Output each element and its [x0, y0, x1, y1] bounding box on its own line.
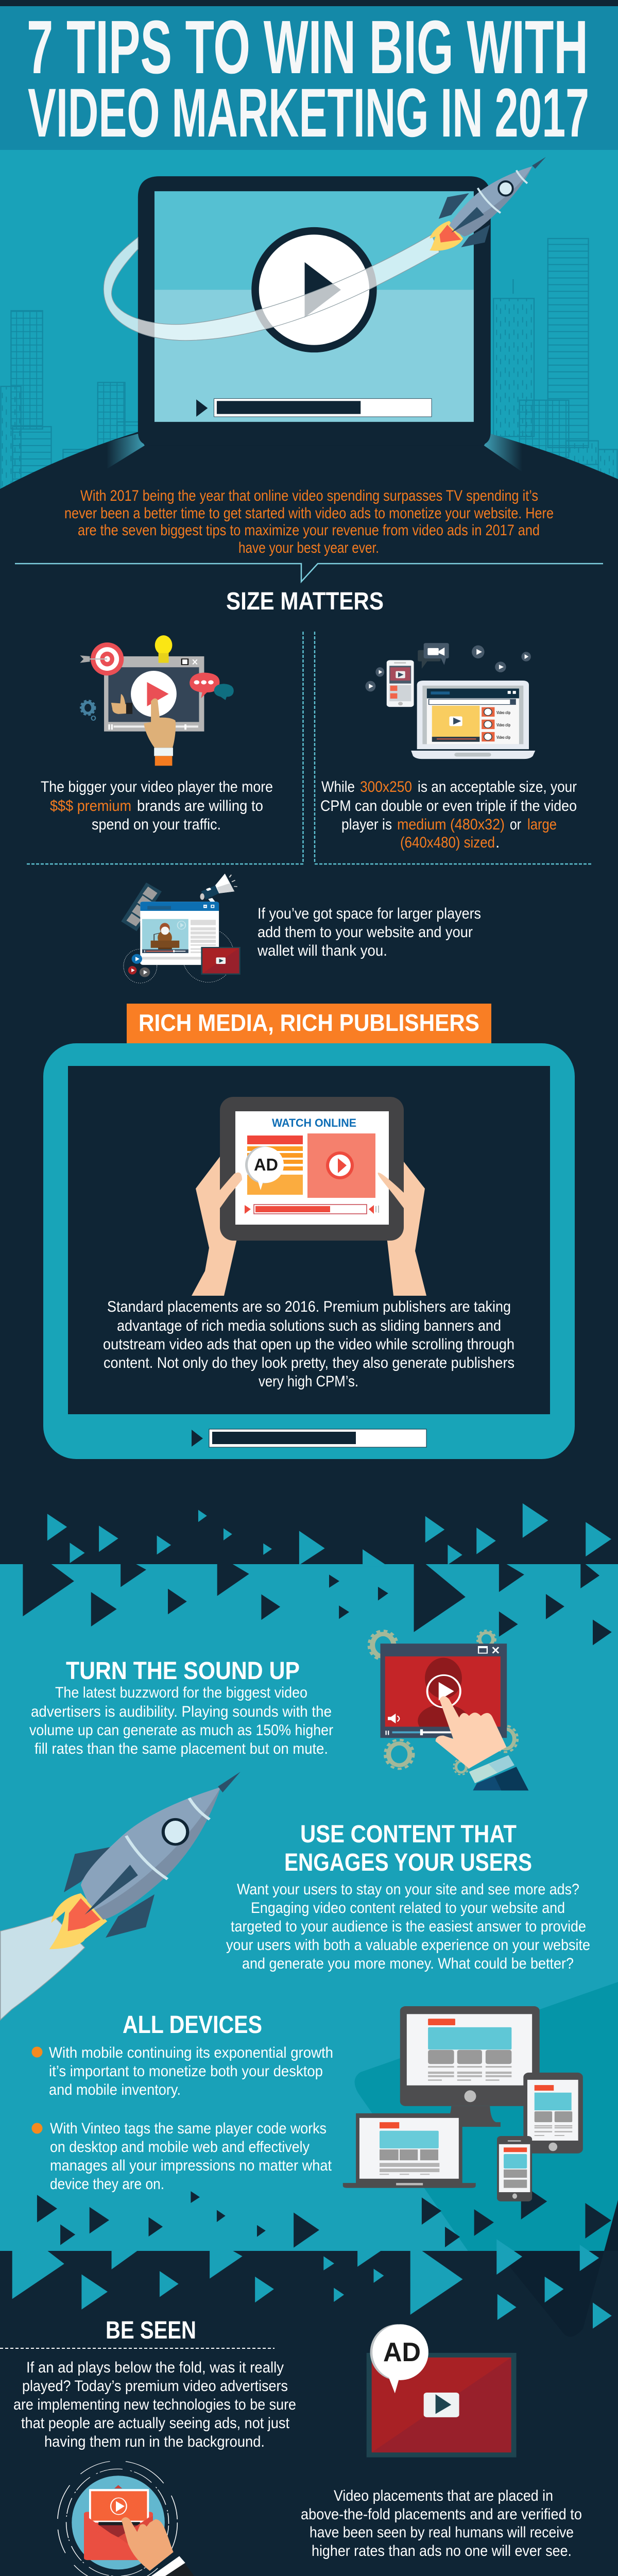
text: audibility: fill rates than the same placement but on mute.	[35, 1740, 328, 1757]
text: below the fold: having them run in the background.	[44, 2433, 265, 2450]
text: 300x250 acceptable size: .	[495, 834, 500, 851]
rocket trail	[1, 1916, 85, 2020]
heading: turn the sound up: TURN THE SOUND UP	[66, 1657, 300, 1685]
text: bigger video player: spend on your traffic.	[92, 816, 221, 833]
text: larger players	[257, 905, 481, 959]
dashed dividers	[27, 632, 591, 864]
icon: video ad with AD bubble: AD	[383, 2337, 421, 2367]
icon: envelope video with hand	[58, 2461, 205, 2576]
text: 300x250 acceptable size: 300x250	[360, 778, 412, 795]
text: standard placements	[103, 1298, 514, 1390]
video clip labels	[496, 710, 510, 740]
bullet text two	[50, 2120, 332, 2193]
bullet text one	[49, 2044, 333, 2098]
icon: video player with target, bulb and hand	[80, 635, 234, 766]
text: standard placements: very high CPM’s.	[259, 1373, 358, 1390]
text: audibility	[29, 1684, 333, 1757]
text: engaging content: Want your users to stay on your site and see more ads?	[237, 1881, 579, 1898]
text: larger players: add them to your website and your	[258, 924, 473, 941]
title banner	[0, 5, 618, 151]
text: audibility: volume up can generate as much as 150% higher	[29, 1722, 333, 1739]
bullet text one: it’s important to monetize both your desktop	[49, 2063, 323, 2080]
intro text: With 2017 being the year that online video spending surpasses TV spending it’s	[80, 487, 538, 504]
large rocket	[1, 1772, 241, 2020]
city skyline	[1, 239, 617, 489]
icon: browser, film strip and megaphone (small)	[121, 874, 241, 983]
text: video placements: Video placements that are placed in	[334, 2487, 553, 2504]
teal section background	[0, 1564, 618, 2251]
icon: responsive devices	[343, 2006, 583, 2201]
text: larger players: wallet will thank you.	[257, 942, 387, 959]
heading: use content	[284, 1821, 532, 1876]
bullet text one: and mobile inventory.	[49, 2081, 181, 2098]
rocket body	[49, 1772, 241, 1949]
text: 300x250 acceptable size: is an acceptable size, your	[418, 778, 577, 795]
bullet two	[32, 2123, 42, 2134]
rocket	[430, 157, 546, 251]
bullet text two: With Vinteo tags the same player code works	[50, 2120, 327, 2137]
text: below the fold: are implementing new technologies to be sure	[13, 2396, 296, 2413]
play triangle pattern: top transition	[23, 1503, 612, 1645]
dark hill	[0, 432, 618, 513]
text: standard placements: content. Not only do they look pretty, they also generate publishers	[104, 1354, 514, 1371]
text: standard placements: Standard placements are so 2016. Premium publishers are taking	[107, 1298, 511, 1315]
rocket trail	[104, 234, 439, 341]
heading: size matters: SIZE MATTERS	[226, 588, 384, 615]
be seen dashed rule	[0, 2348, 274, 2349]
icon: hands holding tablet: WATCH ONLINE	[272, 1116, 356, 1129]
text: audibility: The latest buzzword for the biggest video	[55, 1684, 307, 1701]
text: larger players: If you’ve got space for larger players	[258, 905, 481, 922]
speech line divider	[15, 564, 603, 582]
bullet text two: device they are on.	[50, 2176, 164, 2193]
text: 300x250 acceptable size: or	[510, 816, 521, 833]
text: below the fold: played? Today’s premium video advertisers	[22, 2378, 288, 2395]
text: video placements: above-the-fold placements and are verified to	[301, 2506, 582, 2523]
play triangle pattern: lower transition	[12, 2184, 612, 2329]
video clip labels: Video clip	[496, 710, 510, 715]
text: 300x250 acceptable size: large	[527, 816, 557, 833]
text: video placements: have been seen by real humans will receive	[310, 2524, 574, 2541]
text: bigger video player	[41, 778, 273, 833]
text: engaging content	[226, 1881, 590, 1972]
icon: video ad with AD bubble	[367, 2324, 517, 2458]
video clip labels: Video clip	[496, 723, 510, 727]
text: 300x250 acceptable size	[320, 778, 577, 851]
text: video placements: higher rates than ads no one will ever see.	[312, 2543, 572, 2560]
text: bigger video player: brands are willing to	[137, 798, 263, 815]
hill shadows	[107, 434, 522, 472]
text: 300x250 acceptable size: player is	[341, 816, 392, 833]
text: standard placements: outstream video ads that open up the video while scrolling through	[103, 1336, 514, 1353]
intro text: have your best year ever.	[238, 539, 379, 556]
bullet text two: manages all your impressions no matter what	[50, 2157, 332, 2174]
heading: use content: ENGAGES YOUR USERS	[284, 1849, 532, 1876]
text: engaging content: Engaging video content related to your website and	[251, 1900, 565, 1917]
text: 300x250 acceptable size: medium (480x32)	[397, 816, 505, 833]
icon: laptop and phone video	[365, 643, 535, 759]
heading: all devices: ALL DEVICES	[123, 2011, 262, 2039]
hero illustration	[0, 157, 618, 513]
text: below the fold: If an ad plays below the fold, was it really	[26, 2359, 284, 2376]
text: 300x250 acceptable size: (640x480) sized	[400, 834, 495, 851]
text: audibility: advertisers is audibility. Playing sounds with the	[31, 1703, 332, 1720]
heading banner: rich media: RICH MEDIA, RICH PUBLISHERS	[139, 1009, 479, 1036]
bullet text two: on desktop and mobile web and effectively	[50, 2139, 310, 2156]
icon: hands holding tablet	[192, 1097, 426, 1296]
player progress bar	[192, 1429, 426, 1447]
text: below the fold	[13, 2359, 296, 2450]
heading: be seen: BE SEEN	[106, 2317, 196, 2344]
text: 300x250 acceptable size: CPM can double or even triple if the video	[320, 798, 577, 815]
heading: use content: USE CONTENT THAT	[300, 1821, 517, 1848]
bullet list: devices	[32, 2044, 333, 2193]
text: bigger video player: $$$ premium	[50, 798, 131, 815]
icon: video window with gears and pointing hand	[369, 1631, 528, 1790]
video clip labels: Video clip	[496, 735, 510, 740]
panel: rich media player	[43, 1043, 575, 1459]
text: engaging content: targeted to your audience is the easiest answer to provide	[231, 1918, 586, 1935]
video player monitor	[138, 176, 491, 446]
text: 300x250 acceptable size: While	[321, 778, 355, 795]
text: standard placements: advantage of rich media solutions such as sliding banners and	[117, 1317, 501, 1334]
bullet one	[32, 2046, 42, 2058]
icon: hands holding tablet: AD	[254, 1155, 278, 1174]
text: video placements	[301, 2487, 582, 2560]
bullet text one: With mobile continuing its exponential growth	[49, 2044, 333, 2061]
dark backdrop shape	[497, 2200, 618, 2337]
text: below the fold: that people are actually seeing ads, not just	[21, 2415, 290, 2432]
hero section teal background	[0, 150, 618, 511]
intro text: are the seven biggest tips to maximize your revenue from video ads in 2017 and	[78, 522, 540, 539]
intro text	[64, 487, 554, 556]
text: engaging content: and generate you more money. What could be better?	[242, 1955, 574, 1972]
dark lower section background	[0, 2251, 618, 2576]
text: bigger video player: The bigger your video player the more	[41, 778, 273, 795]
darker teal backdrop shape	[355, 1982, 618, 2293]
heading banner: rich media	[127, 1004, 491, 1043]
